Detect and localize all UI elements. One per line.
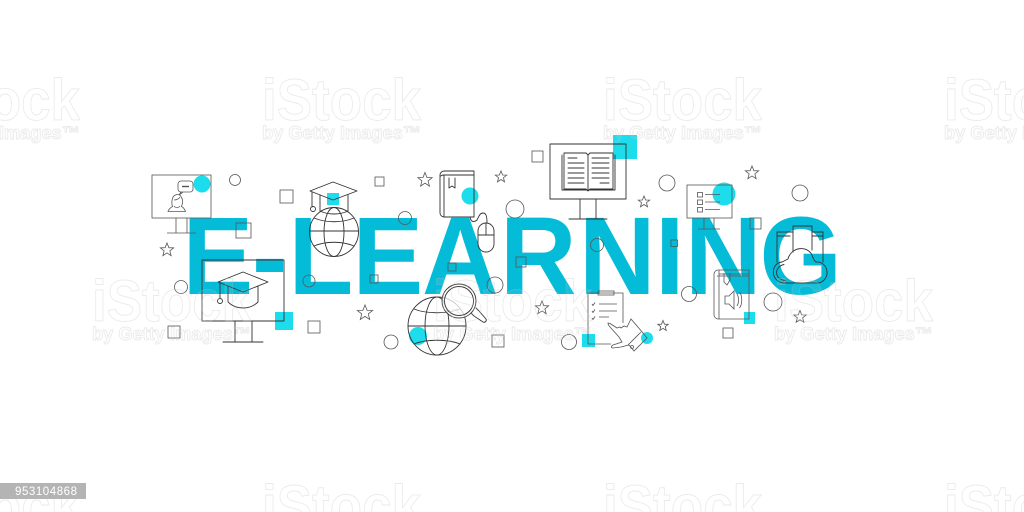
icon: audio book: [714, 270, 755, 324]
iStock watermarks: iStock: [774, 269, 934, 334]
iStock watermarks: iStock: [262, 68, 422, 133]
iStock watermarks: by Getty Images™: [774, 324, 933, 344]
iStock watermarks: iStock: [92, 269, 252, 334]
icon: globe with magnifier: [408, 284, 486, 355]
iStock watermarks: iStock: [433, 269, 593, 334]
icon: monitor with checklist: [687, 182, 736, 229]
stock image number badge: [0, 483, 86, 499]
icon: monitor with graduation cap: [202, 260, 293, 342]
icon: book and mouse: [440, 171, 494, 252]
decorative outlined circles: [174, 174, 808, 350]
icon: monitor with tutor and speech bubble: [152, 175, 211, 233]
decorative outlined squares: [168, 151, 761, 347]
iStock watermarks: iStock: [603, 68, 763, 133]
iStock watermarks: by Getty Images™: [433, 324, 592, 344]
iStock watermarks: by Getty Images™: [92, 324, 251, 344]
iStock watermarks: by Getty Images™: [262, 123, 421, 143]
iStock watermarks: by Getty Images™: [603, 123, 762, 143]
icon: graduation cap and globe: [310, 182, 358, 256]
title: E-LEARNING: E-LEARNING: [182, 194, 842, 318]
stock image number badge: 953104868: [15, 486, 77, 498]
icon: cloud with files: [773, 226, 827, 283]
icon: monitor with open book: [550, 135, 637, 219]
icon: clipboard with pointing hand: [582, 291, 653, 351]
decorative stars: [160, 166, 806, 330]
